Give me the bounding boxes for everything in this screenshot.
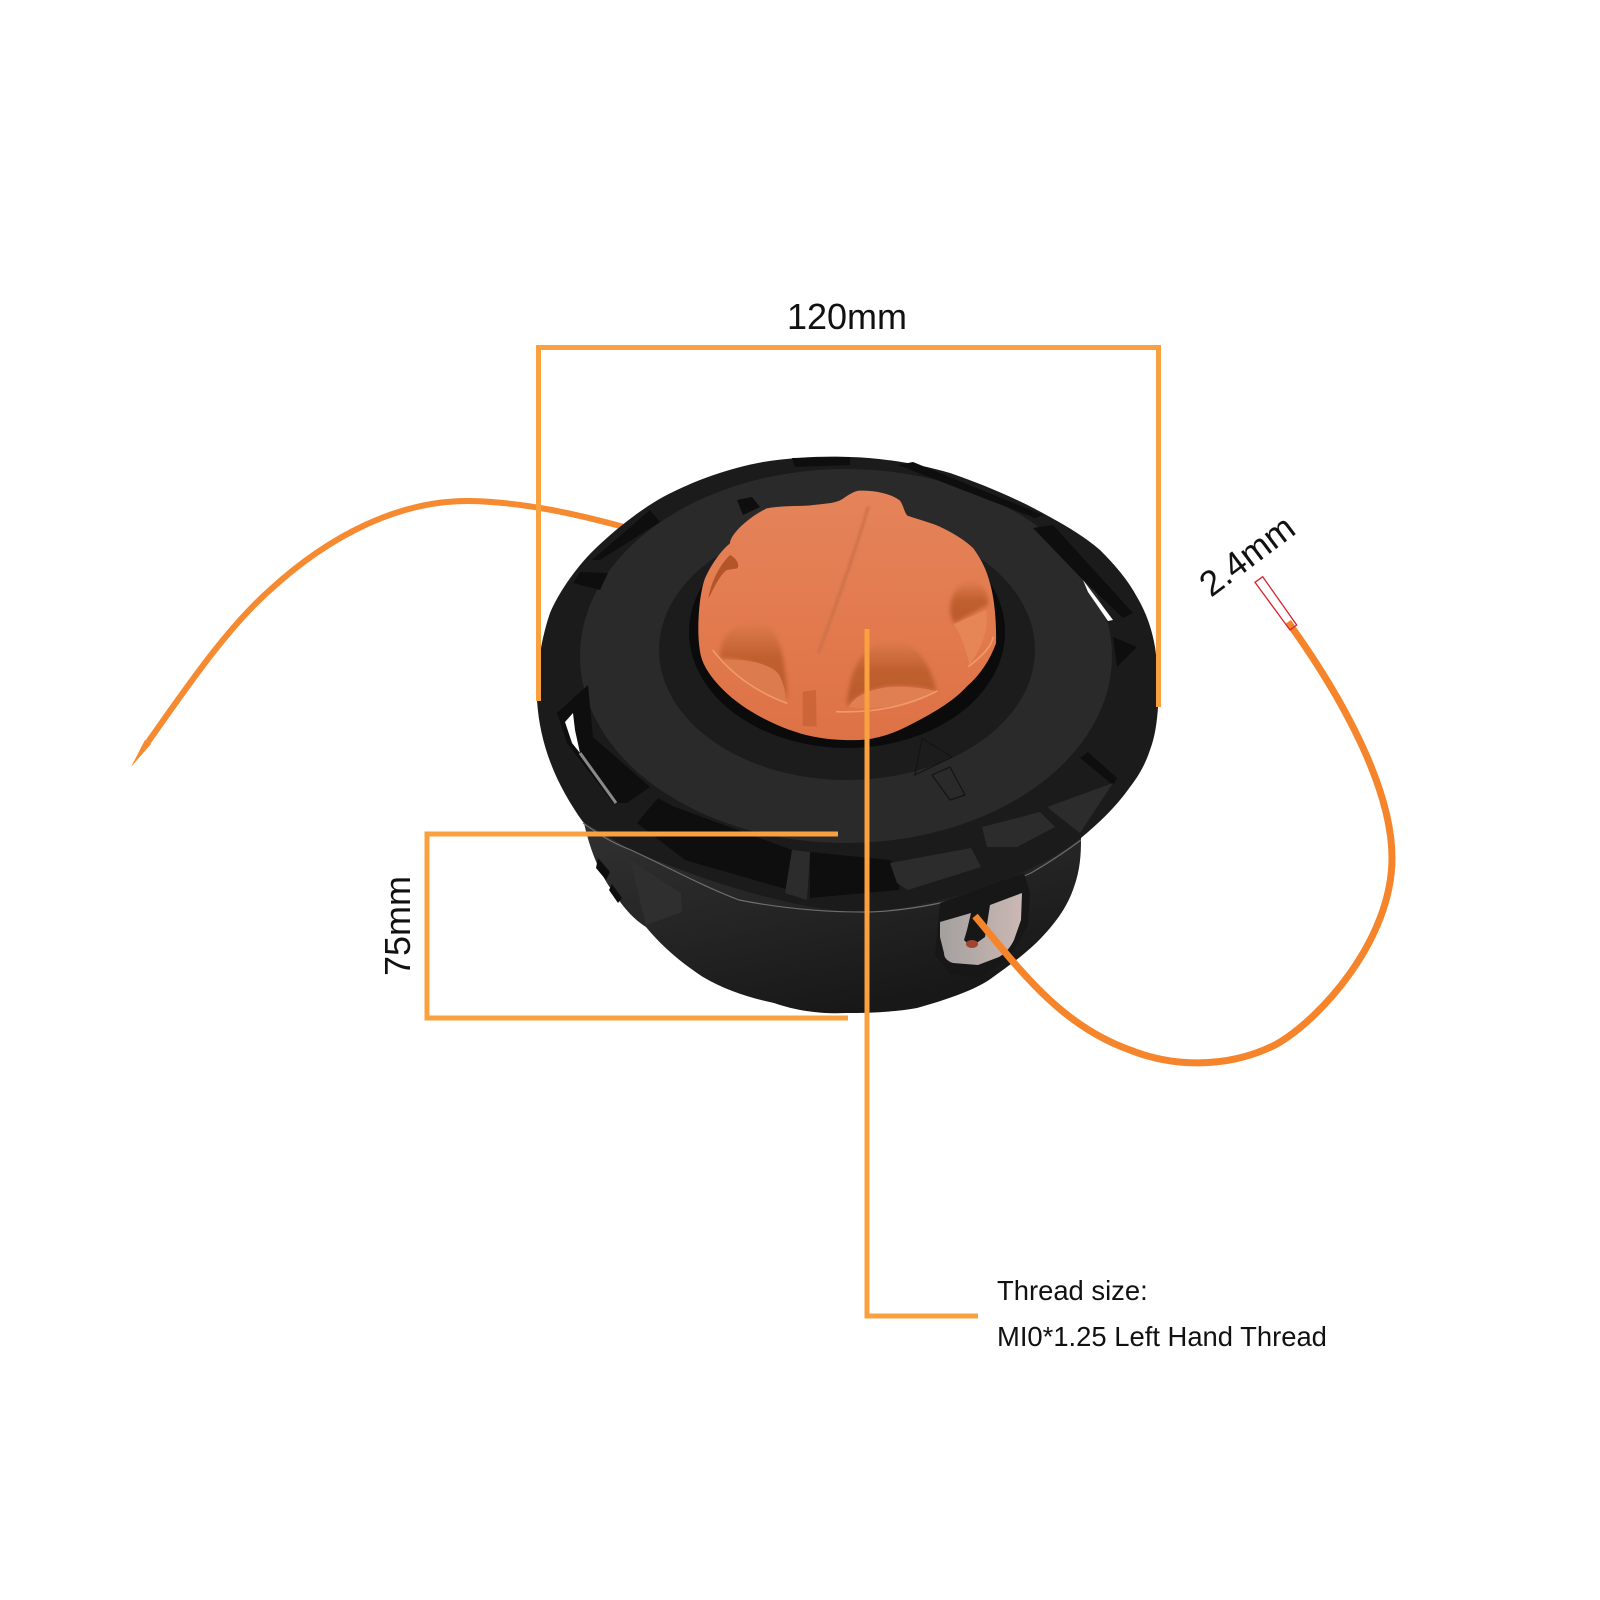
recess center floor <box>848 687 937 708</box>
knob ridge <box>818 507 868 653</box>
knob notch <box>803 690 817 727</box>
spool body <box>583 800 1081 1013</box>
recess upper left <box>708 555 738 598</box>
knob shadow <box>689 516 1005 748</box>
recess left floor <box>723 660 785 702</box>
eyelet red mark <box>966 940 978 948</box>
eyelet housing <box>935 873 1030 977</box>
knob lip highlights <box>713 637 993 712</box>
cut tip <box>131 740 151 767</box>
width bracket <box>538 348 1158 707</box>
raised inner ring <box>659 520 1035 780</box>
left trimmer line <box>131 501 624 767</box>
recess left shadow <box>720 622 787 700</box>
thread size heading: Thread size: <box>997 1275 1148 1306</box>
flange top face <box>580 469 1112 843</box>
recess center shadow <box>847 640 937 707</box>
knob base <box>698 491 996 740</box>
body grip ribs <box>596 858 622 903</box>
eyelet plate <box>940 893 1022 965</box>
underside tabs <box>785 783 1113 900</box>
right trimmer line <box>975 622 1392 1063</box>
thread callout line <box>867 629 978 1316</box>
flange silhouette <box>537 457 1158 912</box>
recess right floor <box>954 610 987 665</box>
label: height: 75mm <box>377 876 418 976</box>
height bracket <box>427 834 848 1018</box>
trimmer head product <box>537 457 1158 1013</box>
metal eyelet <box>935 873 1030 977</box>
label: line diameter: 2.4mm <box>1192 507 1302 604</box>
label: width: 120mm <box>787 296 907 337</box>
flange seam <box>583 823 1081 912</box>
body lug <box>630 860 682 925</box>
knob <box>698 491 996 740</box>
label: thread size <box>997 1275 1327 1352</box>
recess right shadow <box>950 581 988 623</box>
rim windows <box>557 457 1137 898</box>
line cross-section marker <box>1255 577 1297 630</box>
arrow mark <box>915 738 965 800</box>
white slots <box>565 580 1113 803</box>
line strand <box>148 501 624 742</box>
thread size value: MI0*1.25 Left Hand Thread <box>997 1321 1327 1352</box>
